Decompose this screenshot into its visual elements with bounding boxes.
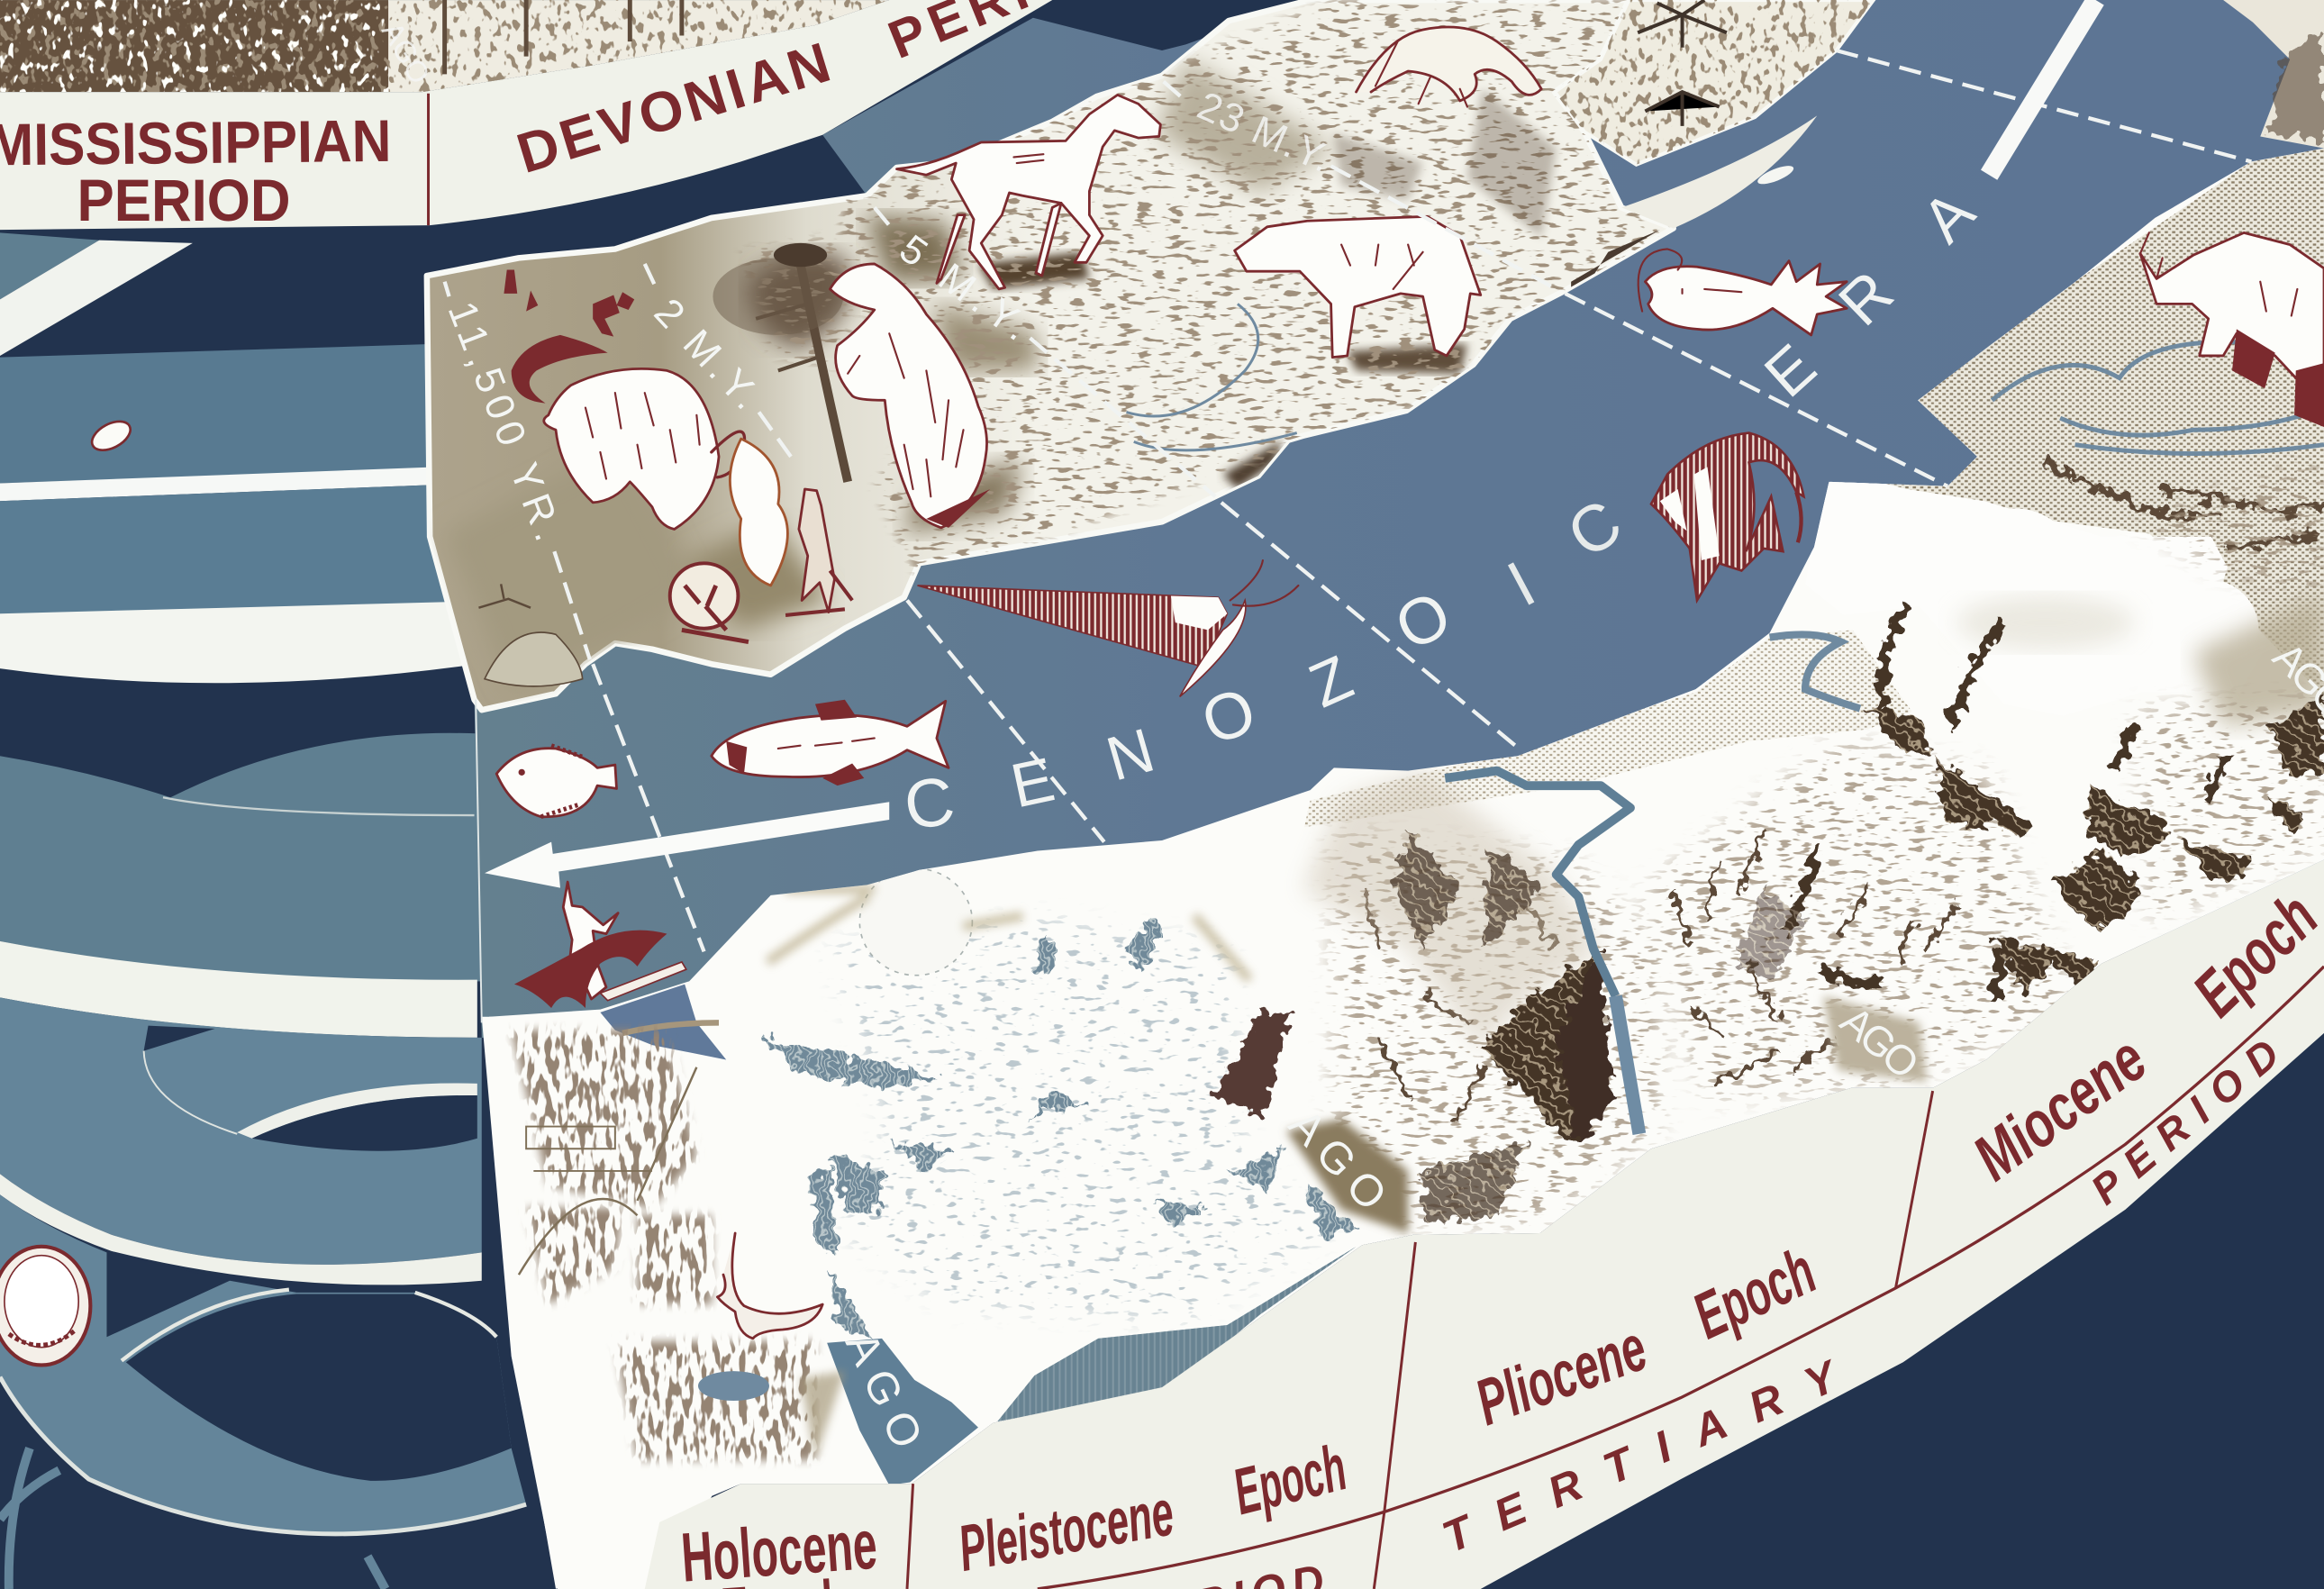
label: Period: PERIOD (77, 167, 291, 233)
icon: eagle in flight (717, 1233, 822, 1339)
label: 5 million years: 5 M.Y. (892, 227, 1038, 350)
white band four (0, 1174, 482, 1285)
stipple plain (1838, 149, 2324, 696)
icon: trout (712, 700, 949, 785)
steel wedge under top band (0, 232, 99, 299)
icon: cone shell (918, 560, 1298, 696)
label: AGO at Pleistocene: AGO (1279, 1100, 1396, 1220)
label: Pliocene: Pliocene (1466, 1311, 1656, 1439)
top band: Mississippian and Devonian (0, 0, 1122, 233)
label: 2 million years: 2 M.Y. (646, 290, 768, 418)
epoch dividers (907, 1091, 1933, 1589)
navy triangle four (106, 1252, 230, 1337)
icon: caveman by fire (785, 489, 852, 615)
steel swoosh lower (0, 1194, 526, 1532)
letter N: N (1099, 714, 1161, 794)
label: 11,500 years: 11,500 YR. (440, 295, 571, 547)
icon: animal skull (670, 563, 749, 642)
icon: tree (713, 243, 848, 482)
letter C: C (899, 762, 959, 845)
letter C: C (1555, 486, 1635, 572)
label: Devonian: DEVONIAN (510, 31, 838, 186)
icon: mammoth (544, 368, 745, 529)
small islet (1756, 162, 1795, 187)
ice sheet blue hatching (761, 868, 1360, 1339)
dashed epoch boundaries (445, 50, 2251, 951)
age labels on the land (440, 84, 2324, 1456)
label: Pliocene Epoch: Epoch (1683, 1234, 1827, 1353)
land textures (0, 0, 1704, 689)
small steel strokes (0, 1448, 386, 1589)
steel band one (0, 344, 437, 483)
icon: running horse (896, 95, 1160, 289)
icon: butterfly fish (1651, 433, 1803, 600)
land: Pleistocene to Miocene northern coast (423, 0, 1875, 713)
bay (600, 985, 726, 1060)
small navy triangle (144, 1026, 215, 1051)
white loop arc (237, 1083, 477, 1139)
navy lens lower (126, 1294, 512, 1481)
label: Mississippian: MISSISSIPPIAN (0, 107, 392, 177)
label: Tertiary Period: PERIOD (2082, 1030, 2288, 1213)
sea of the Cenozoic (475, 0, 2324, 1067)
cloud of volcanic ash (1811, 481, 2259, 629)
letter O: O (1193, 673, 1265, 759)
spiral time bands at left (0, 232, 526, 1589)
steel band two (0, 485, 452, 615)
coastal stipple (1304, 630, 1912, 827)
period boundary curve (1038, 967, 2324, 1589)
icon: hyena (1357, 27, 1541, 107)
left white edge of cylinder (482, 1017, 741, 1589)
icon: ground sloth (830, 264, 990, 528)
icon: flounder (496, 746, 616, 817)
icon: entelodont boar (1235, 216, 1481, 358)
cliff river (1445, 771, 1630, 996)
thin white arc (163, 797, 475, 815)
label: Tertiary: TERTIARY (1436, 1350, 1847, 1563)
letter Z: Z (1299, 641, 1362, 721)
white lower edge (0, 1377, 526, 1534)
white outline arcs (122, 1290, 496, 1361)
icon: anglerfish (1639, 249, 1847, 335)
top right land (2223, 0, 2324, 149)
letter E: E (1005, 744, 1060, 821)
icon: small pebble (87, 415, 135, 456)
white stripe one (0, 467, 437, 501)
letter R: R (1825, 257, 1906, 339)
mountain ink (1319, 455, 2324, 1234)
blue wedge with AGO (827, 1339, 978, 1485)
label: Miocene: Miocene (1961, 1022, 2159, 1194)
canyon shading (1212, 1012, 1291, 1118)
letter E: E (1751, 331, 1829, 410)
white swoosh under top band (0, 241, 193, 356)
bottom band with epochs (645, 859, 2324, 1589)
land: southern relief and northeast plain (486, 0, 2324, 1589)
time arrow stroke to the upper right (1989, 0, 2096, 175)
coastal blue ice shadow (997, 1247, 1357, 1421)
navy lens upper (252, 1095, 477, 1151)
icon: surfer on a wave (514, 882, 686, 1008)
band shape (0, 0, 1052, 230)
steel wide band (0, 997, 482, 1265)
river on land (1127, 304, 1297, 450)
tan ridges on the ice edge (767, 889, 1249, 980)
letter O: O (1384, 577, 1463, 665)
letter I: I (1496, 548, 1547, 621)
title: CENOZOIC ERA lettering (899, 177, 1988, 845)
icon: rhinoceros (2140, 232, 2324, 427)
river channels (1992, 342, 2324, 454)
label: AGO on forest: AGO (376, 16, 437, 89)
city and modern landscape (489, 1008, 845, 1482)
icon: cave paintings (504, 270, 634, 404)
brush strokes on plain (2046, 459, 2324, 549)
label: 23 million years: 23 M.Y. (1191, 84, 1338, 181)
steel loop outline (144, 1051, 237, 1134)
forest illustration (0, 0, 889, 92)
icon: igloo shaped tent (478, 584, 583, 686)
white stripe two (0, 602, 477, 683)
sand spit (1621, 115, 1817, 228)
label: AGO at Holocene: AGO (836, 1325, 932, 1456)
arrow pointing left at present (485, 802, 889, 888)
band divider (428, 94, 430, 225)
tan haze at far right (2193, 593, 2324, 726)
steel band three (0, 733, 482, 982)
land base (427, 0, 1674, 710)
central cliff (1393, 830, 1614, 1223)
label: Pleistocene Epoch: Epoch (1226, 1430, 1353, 1529)
tan shading around central mountains (1304, 771, 1599, 1048)
white band three (0, 941, 477, 1038)
mountain ranges dark hatching (1364, 604, 2324, 1127)
band shape (645, 859, 2324, 1589)
land base (489, 149, 2324, 1589)
icon: smoke of campfire (730, 439, 787, 586)
label: AGO at Pliocene: AGO (1832, 997, 1928, 1088)
icon: round medallion (0, 1247, 90, 1365)
peninsula with palms (1555, 0, 1881, 170)
label: Pleistocene: Pleistocene (953, 1476, 1179, 1585)
letter A: A (1908, 177, 1988, 256)
